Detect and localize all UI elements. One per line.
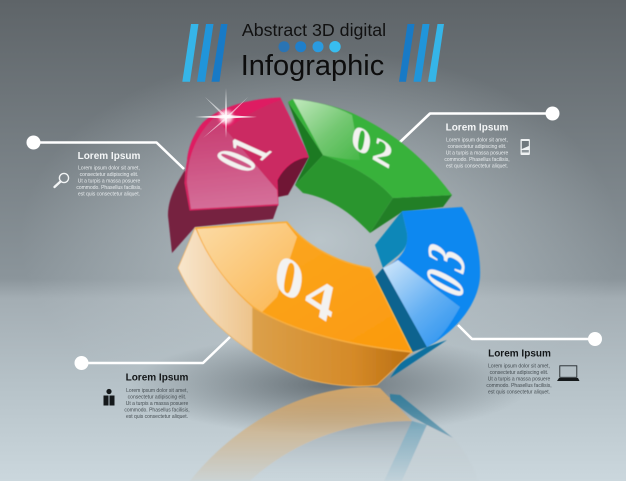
icon: smartphone — [520, 139, 530, 155]
segment 02 green — [288, 99, 452, 233]
title dots — [278, 41, 341, 52]
body text: commodo. Phasellus facilisis, — [444, 157, 510, 163]
body text: est quis consectetur aliquet. — [488, 390, 550, 396]
segment 01 pink — [168, 98, 309, 253]
number 04: 04 — [270, 240, 344, 338]
body text: commodo. Phasellus facilisis, — [76, 185, 142, 191]
number 02: 02 — [348, 115, 398, 178]
body text: est quis consectetur aliquet. — [446, 164, 508, 170]
title heading top line: Abstract 3D digital — [242, 20, 386, 40]
title bars right — [399, 24, 444, 82]
body text: commodo. Phasellus facilisis, — [486, 383, 552, 389]
panel: bottom right text — [486, 348, 552, 396]
body text: Lorem ipsum dolor sit amet, — [78, 166, 140, 172]
panel: top right text — [444, 122, 510, 170]
body text — [76, 166, 142, 198]
body text: Lorem ipsum dolor sit amet, — [488, 364, 550, 370]
segment 03 blue — [375, 207, 480, 378]
body text: Ut a turpis a massa posuere — [446, 150, 508, 156]
title bars left — [182, 24, 228, 82]
body text: Lorem ipsum dolor sit amet, — [446, 138, 508, 144]
body text: consectetur adipiscing elit. — [80, 172, 138, 178]
body text — [124, 388, 190, 420]
panel: top left text — [76, 151, 142, 198]
body text: consectetur adipiscing elit. — [448, 144, 506, 150]
icon: laptop — [557, 366, 580, 381]
heading: Lorem Ipsum — [78, 151, 140, 162]
body text: commodo. Phasellus facilisis, — [124, 408, 190, 414]
body text: consectetur adipiscing elit. — [490, 370, 548, 376]
title heading main line: Infographic — [241, 50, 384, 82]
sparkle on segment 01 — [195, 88, 257, 138]
body text: Lorem ipsum dolor sit amet, — [126, 388, 188, 394]
body text: est quis consectetur aliquet. — [126, 414, 188, 420]
heading: Lorem Ipsum — [126, 372, 188, 384]
heading: Lorem Ipsum — [488, 348, 551, 360]
body text: Ut a turpis a massa posuere — [78, 178, 140, 184]
segment 04 orange — [178, 222, 412, 386]
body text: Ut a turpis a massa posuere — [488, 376, 550, 382]
number 03: 03 — [415, 227, 476, 307]
body text — [444, 138, 510, 170]
icon: person — [104, 389, 114, 406]
number 01: 01 — [202, 130, 285, 180]
icon: magnifier — [54, 173, 69, 187]
body text: est quis consectetur aliquet. — [78, 192, 140, 198]
reflection of the ring — [190, 387, 478, 481]
title block — [182, 20, 444, 82]
body text: consectetur adipiscing elit. — [128, 394, 186, 400]
connector lines — [26, 106, 602, 370]
body text: Ut a turpis a massa posuere — [126, 401, 188, 407]
heading: Lorem Ipsum — [446, 122, 508, 134]
body text — [486, 364, 552, 396]
panel: bottom left text — [124, 372, 190, 420]
